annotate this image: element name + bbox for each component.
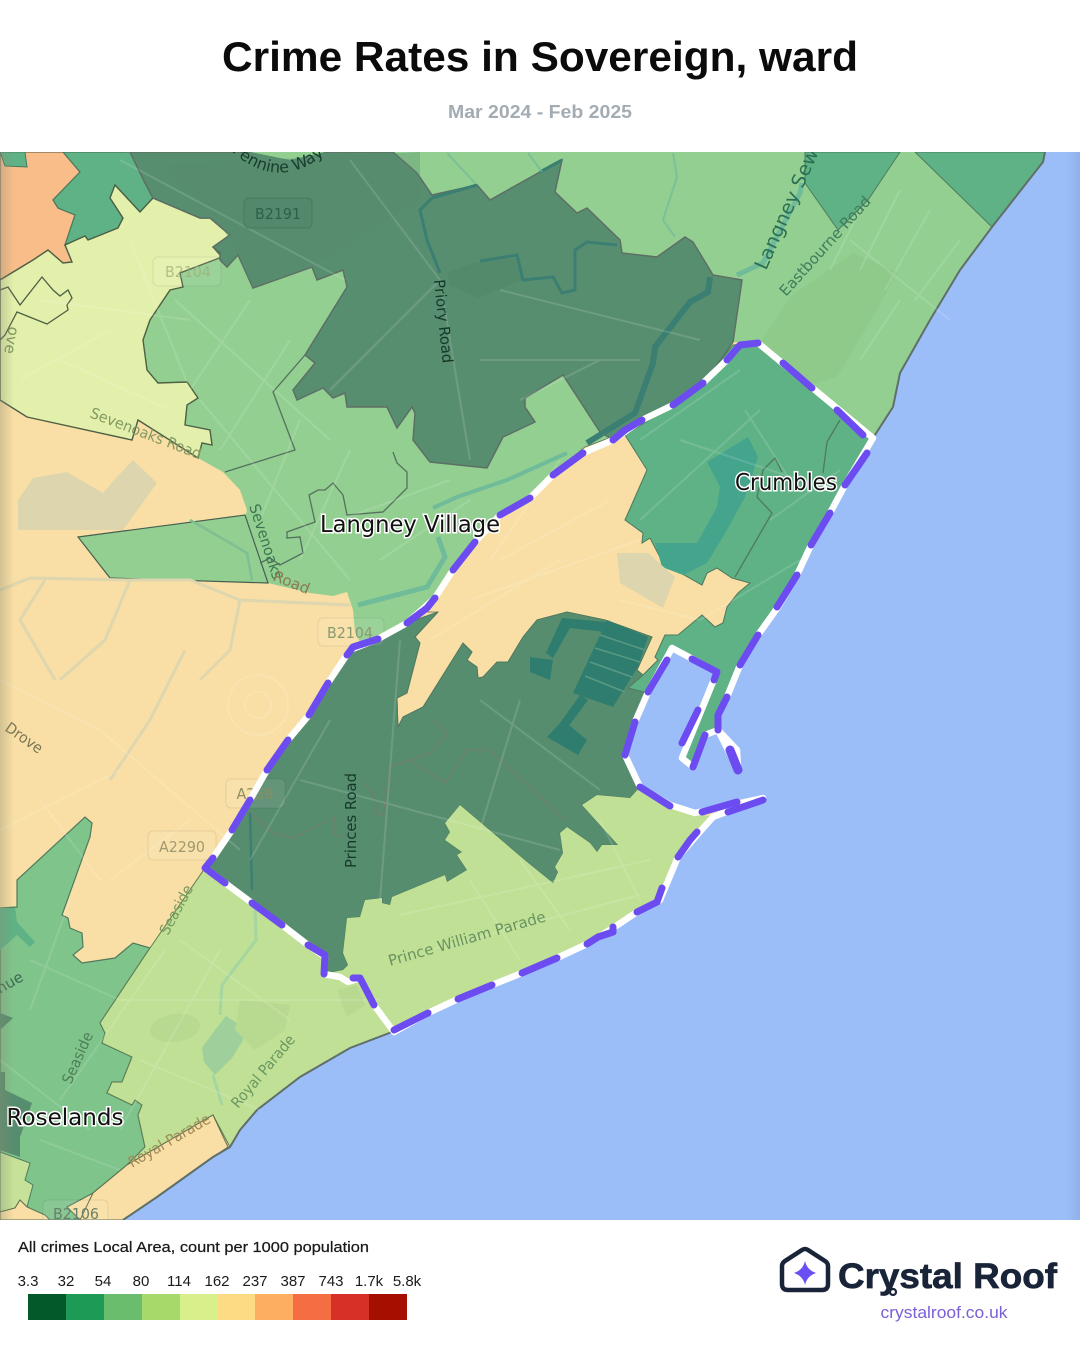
badge: A259: A259 (236, 785, 274, 803)
area: bottom-left sand (0, 1200, 50, 1220)
harbour slats (585, 635, 645, 692)
road label: Royal Parade west: Royal Parade (125, 1110, 214, 1171)
badge: B2104 north (153, 257, 221, 286)
grey main roads in sand (0, 578, 350, 780)
road label: Drove: Drove (2, 719, 46, 757)
area: bottom-left lime (0, 1152, 33, 1212)
legend values: 237 (242, 1273, 268, 1290)
area: dark green north (130, 152, 742, 468)
road label: Priory Road: Priory Road (430, 279, 457, 364)
place label: Langney Village: Langney Village (320, 512, 500, 538)
area: left dark patches (0, 1013, 32, 1157)
road label: Eastbourne Road: Eastbourne Road (776, 193, 875, 300)
area: seaside lime (100, 868, 392, 1165)
feature: sports track (162, 1017, 192, 1037)
rivers in dark north (250, 160, 710, 890)
legend title: All crimes Local Area, count per 1000 population (18, 1239, 369, 1256)
road badges (43, 198, 384, 1228)
legend values (18, 1273, 422, 1290)
coastline south-west (123, 1032, 392, 1220)
ward boundary: white (205, 343, 873, 1032)
road label: Seaside north: Seaside (156, 882, 197, 938)
badge: A259 (226, 779, 285, 808)
road label: Drove top fragment: ove (0, 325, 23, 355)
badge: B2104 south: B2104 (327, 624, 373, 642)
area: teal north-east 2 (915, 152, 1045, 227)
road network (0, 160, 960, 1170)
area: darker top band (224, 152, 420, 288)
thin boundaries in pale area (0, 277, 72, 340)
website: crystalroof.co.uk (880, 1304, 1008, 1322)
area: mid green enclave (78, 515, 268, 583)
feature: Crumbles lagoon (655, 437, 758, 575)
badge: B2191 (244, 198, 312, 228)
legend colour scale (28, 1294, 407, 1320)
legend values: 5.8k (393, 1273, 422, 1290)
area: top mid-green strip at Pennine Way (250, 152, 325, 160)
road label: Sevenoaks south: Sevenoaks (245, 502, 286, 582)
area: Crumbles green (625, 343, 872, 767)
right edge fade (1066, 152, 1080, 1220)
icon: house with star (782, 1249, 828, 1290)
legend values: 743 (318, 1273, 344, 1290)
road labels (0, 152, 871, 1168)
feature: grey dock patch (617, 553, 675, 608)
title: Crime Rates in Sovereign, ward (222, 33, 858, 80)
thin boundaries in dark ward (250, 720, 565, 838)
subtitle: date range: Mar 2024 - Feb 2025 (448, 102, 632, 122)
badge: A2290 (148, 831, 216, 860)
legend values: 54 (95, 1273, 111, 1290)
legend values: 1.7k (355, 1273, 384, 1290)
road label: Road south: Road (271, 567, 312, 598)
area: top-left green (53, 152, 153, 245)
logo: Crystal Roof (782, 1249, 1057, 1322)
area: mid green north-east (393, 152, 1045, 438)
road label: Sevenoaks Road north: Sevenoaks Road (88, 404, 204, 463)
area: top-left orange (0, 152, 80, 280)
legend (18, 1239, 422, 1320)
thin boundaries in north-west green (225, 355, 407, 565)
area: mid green north-west and centre (143, 240, 625, 650)
badge: B2104 north: B2104 (165, 263, 211, 281)
area: top-left small teal (0, 152, 27, 167)
legend values: 114 (167, 1273, 191, 1290)
road label: Seaside south: Seaside (58, 1029, 97, 1087)
wordmark key detail (890, 1289, 896, 1295)
badge: B2104 south (318, 618, 384, 646)
thin boundaries in Crumbles (735, 420, 840, 577)
area: ward dark green (205, 612, 652, 973)
road label: Pennine Way: Pennine Way (233, 152, 322, 173)
area: ward sand (397, 432, 750, 727)
place labels (6, 470, 837, 1131)
road label: Princes Road: Princes Road (342, 773, 360, 868)
badge: B2106 (43, 1200, 108, 1228)
ward boundary: purple dashes (205, 343, 867, 1030)
legend values: 3.3 (18, 1273, 38, 1290)
area: lower-left green (0, 817, 150, 1220)
legend values: 80 (133, 1273, 149, 1290)
wordmark: Crystal Roof (838, 1257, 1057, 1296)
legend values: 32 (58, 1273, 74, 1290)
road label: Langney Sewer: Langney Sewer (750, 127, 832, 273)
feature: light blocks (235, 1022, 242, 1038)
area: ward lime (328, 787, 713, 1032)
feature: harbour basin in dark area (530, 618, 648, 755)
area: teal north-east 1 (805, 152, 900, 230)
badge: B2191: B2191 (255, 205, 301, 223)
feature: pond (202, 1016, 243, 1075)
area: south-west sand strip (80, 1115, 228, 1220)
area: pale yellow-green north west (0, 185, 230, 458)
left edge fade (0, 152, 14, 1220)
badge: B2106: B2106 (53, 1205, 99, 1223)
area: lower-left teal (0, 908, 35, 950)
legend values: 387 (280, 1273, 306, 1290)
area: north-east shade (760, 253, 897, 385)
sea (123, 152, 1080, 1220)
coastline north-east (873, 152, 1045, 438)
river in enclave (190, 520, 252, 580)
place label: Crumbles: Crumbles (735, 470, 837, 496)
area: darker enclave in north (447, 258, 523, 298)
rivers in north green (358, 153, 802, 605)
river in seaside lime (213, 905, 256, 1105)
feature: grey patch by Sevenoaks Road (18, 460, 157, 530)
badge: A2290: A2290 (159, 838, 205, 856)
road label: Royal Parade east: Royal Parade (227, 1031, 299, 1112)
place label: Roselands: Roselands (6, 1105, 124, 1131)
road label: Prince William Parade: Prince William Parade (386, 908, 548, 970)
legend values: 162 (204, 1273, 230, 1290)
